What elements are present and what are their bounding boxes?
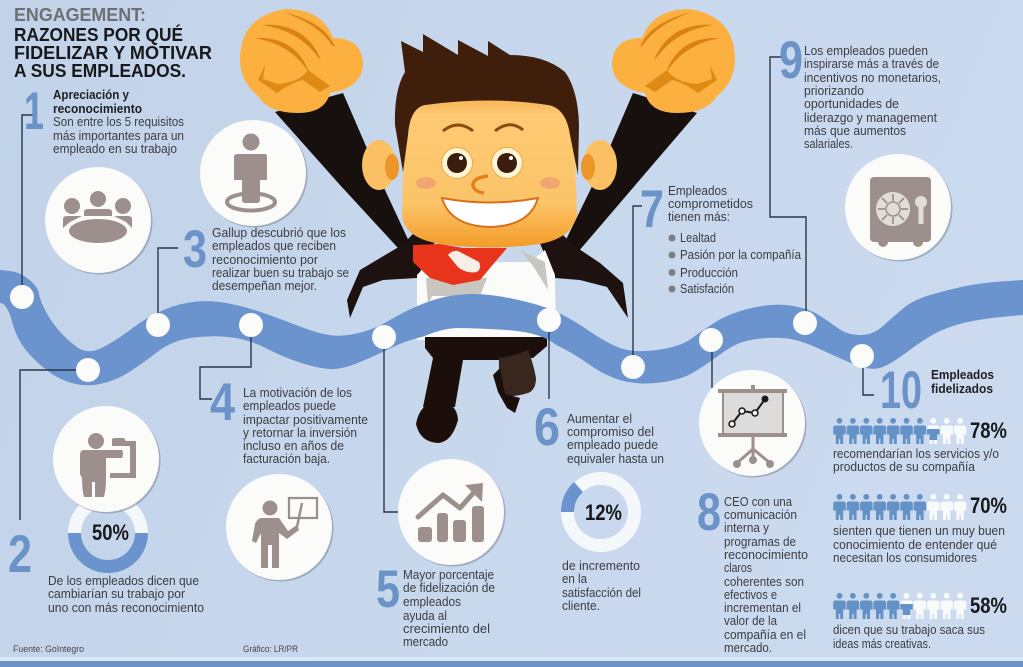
text: step 8: CEO con una — [724, 495, 792, 509]
jacket and tails — [347, 232, 628, 318]
number 4: 4 — [210, 373, 235, 432]
donut: 12% — [561, 478, 634, 546]
text: step 3: realizar buen su trabajo se — [212, 266, 349, 280]
text: step 9: más que aumentos — [804, 124, 906, 138]
bullet list — [668, 231, 801, 296]
text: step 8 — [724, 495, 808, 655]
number 3: 3 — [183, 220, 207, 279]
collar — [448, 251, 480, 272]
panel: step 4 — [210, 373, 368, 582]
text: step 3: desempeñan mejor. — [212, 279, 317, 293]
text: step 3: empleados que reciben — [212, 239, 336, 253]
connector lines — [20, 57, 874, 520]
number 8: 8 — [697, 483, 721, 542]
panel: step 6 — [534, 398, 664, 613]
text: step 2: cambiarían su trabajo por — [48, 587, 185, 601]
text: 58%: dicen que su trabajo saca sus — [833, 623, 985, 637]
text: step 4 — [243, 386, 368, 466]
title: A SUS EMPLEADOS. — [14, 60, 186, 81]
icon: presenter with board — [226, 474, 334, 582]
text: step 9: inspirarse más a través de — [804, 57, 939, 71]
heading: empleados fidelizados: Empleados — [931, 368, 994, 382]
icon: person on target — [200, 120, 308, 228]
heading: empleados fidelizados — [931, 368, 994, 396]
heading: empleados fidelizados: fidelizados — [931, 382, 993, 396]
bullet list: Lealtad — [680, 231, 716, 245]
text: step 9: liderazgo y management — [804, 111, 937, 125]
number 10: 10 — [880, 361, 922, 420]
nose — [473, 176, 488, 193]
bullet list: Producción — [680, 266, 738, 280]
text: 58%: ideas más creativas. — [833, 637, 931, 651]
text: step 6 intro — [567, 412, 664, 466]
bottom band — [0, 657, 1023, 667]
text: step 8: efectivos e — [724, 588, 777, 602]
donut: 50%: 50% — [92, 520, 129, 545]
text: step 4: empleados puede — [243, 399, 336, 413]
panel: step 1 — [24, 82, 184, 274]
text: step 5: de fidelización de — [403, 581, 495, 595]
text: step 2: uno con más reconocimiento — [48, 601, 204, 615]
panel: step 10 — [833, 361, 1007, 651]
text: 78% — [833, 447, 999, 474]
text: step 8: reconocimiento — [724, 548, 808, 562]
number 2: 2 — [8, 525, 32, 584]
text: step 6 result: en la — [562, 572, 587, 586]
right fist — [612, 9, 735, 113]
panel: step 8 — [697, 370, 808, 655]
number 9: 9 — [779, 31, 803, 90]
text: step 3: reconocimiento por — [212, 253, 318, 267]
pictogram row: 58%: 58% — [970, 593, 1007, 618]
right arm — [560, 93, 697, 252]
shirt — [417, 250, 556, 340]
number 6: 6 — [534, 398, 560, 457]
hair — [395, 34, 579, 175]
text: step 1: Apreciación y — [53, 88, 129, 102]
left arm — [275, 93, 412, 248]
text: step 6 result: satisfacción del — [562, 586, 641, 600]
text: 70%: sienten que tienen un muy buen — [833, 524, 1005, 538]
title — [14, 4, 212, 81]
donut: 50% — [68, 493, 148, 573]
text: step 8: interna y — [724, 521, 770, 535]
text: step 6 intro: equivaler hasta un — [567, 452, 664, 466]
text: step 6 result: cliente. — [562, 599, 600, 613]
text: step 4: incluso en años de — [243, 439, 344, 453]
text: step 9: incentivos no monetarios, — [804, 71, 941, 85]
text: step 7: tienen más: — [668, 210, 730, 224]
text: step 1: empleado en su trabajo — [53, 142, 177, 156]
icon: presentation board — [699, 370, 806, 478]
cheeks — [416, 177, 560, 189]
text: step 8: valor de la — [724, 614, 777, 628]
text: step 6 intro: empleado puede — [567, 438, 658, 452]
text: 78%: recomendarían los servicios y/o — [833, 447, 999, 461]
text: step 6 intro: compromiso del — [567, 425, 654, 439]
character: jumping employee — [240, 9, 735, 443]
text: step 4: impactar positivamente — [243, 413, 368, 427]
source credit: Fuente: GoIntegro — [13, 644, 84, 655]
eyebrows — [443, 125, 523, 131]
text: step 6 result: de incremento — [562, 559, 640, 573]
text: step 1: Son entre los 5 requisitos — [53, 115, 184, 129]
text: step 9 — [804, 44, 941, 151]
icon: growth chart — [398, 459, 506, 566]
text: step 5 — [403, 568, 495, 649]
pictogram row: 58% — [833, 593, 1007, 619]
text: step 3 — [212, 226, 349, 293]
text: 70%: conocimiento de entender qué — [833, 538, 997, 552]
text: step 8: claros — [724, 561, 752, 575]
text: step 2 — [48, 574, 204, 615]
icon: meeting table — [45, 167, 152, 274]
face — [402, 100, 577, 248]
text: step 9: oportunidades de — [804, 97, 899, 111]
pants — [423, 337, 547, 407]
text: step 8: coherentes son — [724, 575, 804, 589]
text: step 2: De los empleados dicen que — [48, 574, 199, 588]
pictogram row: 78%: 78% — [970, 418, 1007, 443]
ears — [362, 140, 617, 190]
bullet list: Pasión por la compañía — [680, 248, 801, 262]
graphic credit: Gráfico: LR/PR — [243, 644, 298, 655]
icon: presenter with folder — [53, 406, 160, 514]
ribbon timeline — [0, 270, 1023, 385]
text: step 9: priorizando — [804, 84, 864, 98]
panel: step 7 — [640, 180, 801, 296]
text: step 4: y retornar la inversión — [243, 426, 357, 440]
text: 58% — [833, 623, 985, 651]
text: step 4: facturación baja. — [243, 452, 330, 466]
text: step 9: Los empleados pueden — [804, 44, 928, 58]
donut: 12%: 12% — [585, 500, 622, 525]
text: step 5: Mayor porcentaje — [403, 568, 494, 582]
text: step 5: ayuda al — [403, 609, 447, 623]
pictogram row: 70%: 70% — [970, 493, 1007, 518]
text: step 7 — [668, 184, 753, 224]
bullet list: Satisfación — [680, 282, 734, 296]
text: step 8: comunicación — [724, 508, 797, 522]
text: step 8: incrementan el — [724, 601, 801, 615]
text: step 1 — [53, 88, 184, 156]
number 7: 7 — [640, 180, 664, 239]
text: step 3: Gallup descubrió que los — [212, 226, 346, 240]
shirt shading — [426, 250, 548, 305]
right shoe — [493, 368, 520, 413]
text: step 7: comprometidos — [668, 197, 753, 211]
text: 78%: productos de su compañía — [833, 460, 975, 474]
title: RAZONES POR QUÉ — [14, 24, 183, 45]
left shoe — [416, 402, 458, 443]
number 1: 1 — [24, 82, 44, 141]
panel: step 9 — [779, 31, 952, 262]
text: 70%: necesitan los consumidores — [833, 551, 977, 565]
text: step 7: Empleados — [668, 184, 727, 198]
text: step 1: más importantes para un — [53, 129, 184, 143]
text: step 5: crecimiento del — [403, 622, 490, 636]
timeline nodes — [10, 285, 874, 382]
text: step 5: mercado — [403, 635, 448, 649]
eyes — [442, 148, 522, 178]
panel: step 3 — [183, 120, 349, 293]
text: step 8: mercado. — [724, 641, 772, 655]
text: step 9: salariales. — [804, 137, 853, 151]
text: step 8: programas de — [724, 535, 796, 549]
text: step 6 intro: Aumentar el — [567, 412, 632, 426]
text: step 5: empleados — [403, 595, 461, 609]
mouth — [442, 198, 538, 227]
panel: step 5 — [376, 459, 506, 649]
title: FIDELIZAR Y MOTIVAR — [14, 42, 212, 63]
pictogram row: 78% — [833, 418, 1007, 444]
text: step 8: compañía en el — [724, 628, 806, 642]
title: ENGAGEMENT: — [14, 4, 146, 25]
number 5: 5 — [376, 560, 400, 619]
icon: safe — [845, 154, 952, 262]
tie — [413, 244, 507, 285]
text: step 1: reconocimiento — [53, 102, 142, 116]
left fist — [240, 9, 363, 113]
raised leg — [499, 350, 536, 396]
text: step 4: La motivación de los — [243, 386, 352, 400]
pictogram row: 70% — [833, 493, 1007, 520]
text: step 6 result — [562, 559, 641, 613]
text: 70% — [833, 524, 1005, 565]
panel: step 2 — [8, 406, 204, 615]
